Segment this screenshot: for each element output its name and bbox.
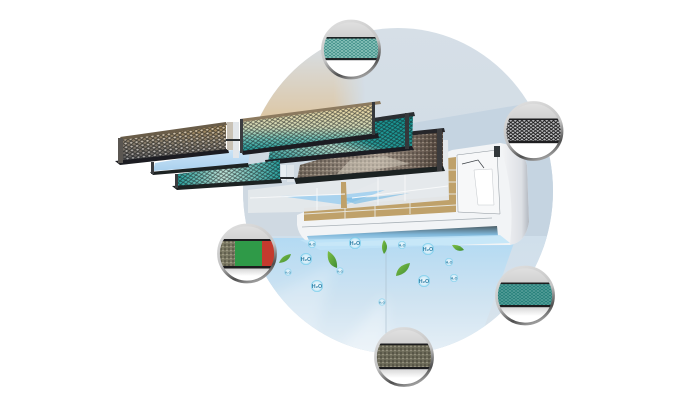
lens: right teal filter [496, 266, 554, 326]
outlet glow [300, 235, 510, 250]
water bubbles [284, 237, 458, 306]
water bubbles: H₂O [309, 242, 316, 246]
water bubbles: H₂O [301, 257, 312, 263]
water bubbles: H₂O [379, 300, 386, 304]
background circle scene [243, 28, 553, 352]
green leaves [279, 240, 464, 276]
peeled white mesh filter [248, 140, 449, 213]
water bubbles: H₂O [312, 284, 323, 290]
water bubbles: H₂O [423, 247, 434, 253]
filter panel: teal lower left [172, 160, 294, 190]
lens: top teal mesh filter [322, 20, 380, 80]
water bubbles: H₂O [419, 279, 430, 285]
lens: bottom dense grey filter [375, 328, 433, 388]
lens: right black mesh filter [504, 102, 564, 162]
air conditioner indoor unit [297, 143, 529, 250]
stacked filter panels [115, 101, 445, 190]
filter panel: teal right [265, 112, 415, 165]
gold heat exchanger coil [304, 157, 456, 221]
water bubbles: H₂O [285, 270, 292, 274]
filter panel: brown left [115, 122, 240, 165]
filter panel: cream and teal front [240, 101, 381, 155]
water bubbles: H₂O [337, 270, 344, 274]
water bubbles: H₂O [399, 244, 406, 248]
filter panel: speckled brown [294, 128, 445, 184]
water bubbles: H₂O [446, 260, 453, 264]
infographic: air conditioner filters [115, 20, 564, 387]
bracket [494, 146, 500, 157]
water bubbles: H₂O [451, 276, 458, 280]
unit body [297, 143, 529, 246]
lens: red and green filter [218, 224, 276, 284]
airflow particles [279, 237, 464, 306]
water bubbles: H₂O [350, 241, 361, 247]
electronics box [457, 150, 500, 214]
magnifier lenses [218, 20, 564, 388]
air vent [307, 226, 498, 243]
circuit cover [474, 169, 494, 205]
right side panel [499, 143, 529, 245]
filter panel: blue [150, 150, 250, 175]
